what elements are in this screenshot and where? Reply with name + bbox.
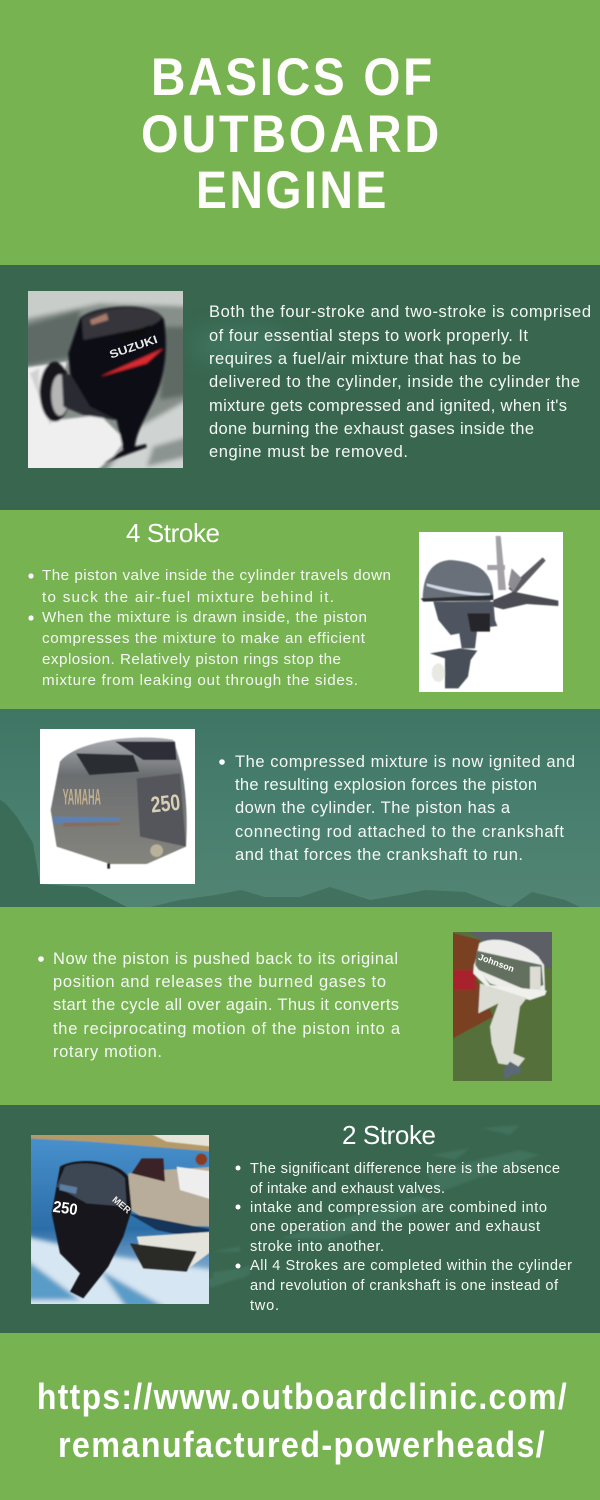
photo: Mercury outboard on speedboat: MER [110,1195,133,1216]
2 stroke bullet list: The significant difference here is the absence [250,1161,560,1177]
photo: Yamaha 250 cowling [40,729,195,884]
bullet text: exhaust: position and releases the burned gases to [53,973,386,991]
brush texture [205,1125,540,1288]
photo: Yamaha 250 cowling: YAMAHA [63,785,101,810]
2 stroke bullet list: and revolution of crankshaft is one instead of [250,1278,559,1294]
bullet text: exhaust: the reciprocating motion of the piston into a [53,1020,401,1038]
2 stroke bullet list: of intake and exhaust valves. [250,1181,445,1197]
title: OUTBOARD [141,105,442,164]
photo: Suzuki outboard on boat [28,291,183,468]
bullet text: ignition: the resulting explosion forces the piston [235,776,537,794]
intro text: requires a fuel/air mixture that has to be [209,350,521,368]
photo: Mercury outboard on speedboat: 250 [52,1199,79,1219]
intro text: mixture gets compressed and ignited, when it's [209,397,567,415]
photo: Yamaha portable outboard [419,532,563,692]
title: BASICS OF [151,48,435,107]
panel: 2 stroke [0,1105,600,1333]
intro text: delivered to the cylinder, inside the cylinder the [209,373,580,391]
footer URL: remanufactured-powerheads/ [58,1424,546,1465]
title [141,48,442,220]
2 stroke bullet list: intake and compression are combined into [250,1200,547,1216]
bullet text: ignition [219,753,575,864]
4 stroke bullet list: mixture from leaking out through the sides. [42,672,358,689]
bullet text: ignition: and that forces the crankshaft to run. [235,846,523,864]
bullet text: ignition: down the cylinder. The piston has a [235,799,511,817]
2 stroke bullet list: All 4 Strokes are completed within the cylinder [250,1258,572,1274]
mountain ridge [150,887,580,907]
4 stroke bullet list: explosion. Relatively piston rings stop the [42,651,341,668]
bullet text: exhaust: Now the piston is pushed back to its original [53,950,398,968]
bullet text: ignition: connecting rod attached to the crankshaft [235,823,564,841]
4 stroke bullet list: compresses the mixture to make an efficient [42,630,366,647]
2 stroke bullet list [236,1161,572,1314]
photo: Johnson outboard on grass: Johnson [477,952,516,974]
photo: Johnson outboard on grass [450,930,553,1083]
heading: 4 Stroke: 4 Stroke [126,518,220,548]
intro text: Both the four-stroke and two-stroke is comprised [209,303,591,321]
heading: 2 Stroke: 2 Stroke [342,1120,436,1150]
panel: introduction [0,265,600,510]
2 stroke bullet list: stroke into another. [250,1239,384,1255]
bullet text: exhaust: rotary motion. [53,1043,162,1061]
panel: ignition and power stroke [0,709,600,907]
title: ENGINE [196,161,389,220]
intro text: of four essential steps to work properly. It [209,327,528,345]
4 stroke bullet list: to suck the air-fuel mixture behind it. [42,589,334,606]
panel: 4 stroke [28,518,563,692]
bullet text: exhaust: start the cycle all over again. Thus it converts [53,996,399,1014]
4 stroke bullet list: When the mixture is drawn inside, the piston [42,609,367,626]
2 stroke bullet list: one operation and the power and exhaust [250,1219,540,1235]
2 stroke bullet list: two. [250,1298,279,1314]
intro text [209,303,591,461]
photo: Mercury outboard on speedboat [27,1132,213,1308]
panel: exhaust stroke [38,930,553,1083]
intro text: done burning the exhaust gases inside the [209,420,534,438]
intro text: engine must be removed. [209,443,408,461]
4 stroke bullet list [28,567,391,689]
photo: Yamaha 250 cowling: 250 [149,789,181,818]
mountain silhouette [0,800,127,907]
photo: Suzuki outboard on boat: SUZUKI [108,334,159,361]
bullet text: exhaust [38,950,401,1061]
bullet text: ignition: The compressed mixture is now ignited and [235,753,575,771]
footer URL [37,1376,568,1465]
4 stroke bullet list: The piston valve inside the cylinder travels down [42,567,391,584]
